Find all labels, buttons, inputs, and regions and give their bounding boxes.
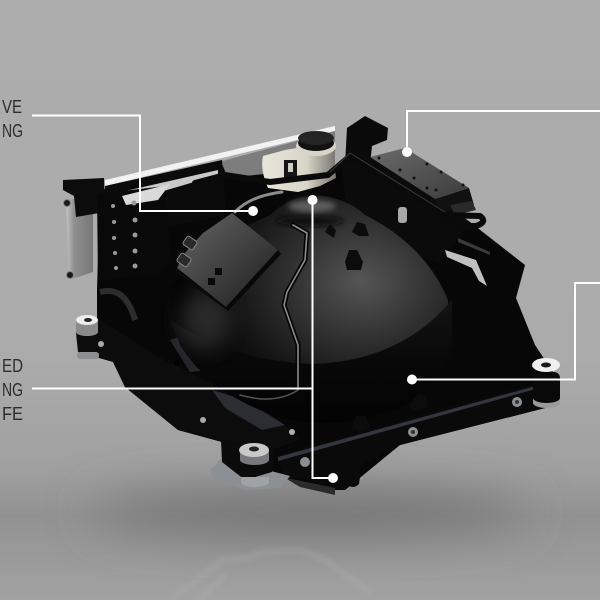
rear white edge strip [105, 126, 335, 186]
callout: label top left: VE [2, 97, 22, 117]
dome tank [170, 195, 452, 432]
left foot [76, 315, 99, 359]
right side machinery [398, 207, 490, 286]
callout: label bottom left: ED [2, 356, 23, 376]
solid machine silhouette [97, 164, 555, 490]
rear rail [105, 160, 226, 240]
front rail [275, 376, 558, 495]
silver tube [235, 192, 307, 399]
bottom nub [345, 470, 361, 487]
rear panel [222, 131, 335, 180]
electronics box [174, 213, 281, 311]
top tower [345, 116, 388, 165]
leader line: right [407, 283, 600, 384]
leader line: top left [32, 116, 258, 216]
floor shadow [90, 492, 530, 532]
radiator side plate [66, 197, 93, 280]
connector block [97, 184, 172, 280]
left rail [76, 318, 300, 462]
coolant reservoir [262, 131, 336, 192]
top left bracket [63, 178, 105, 217]
floor reflection [170, 550, 370, 600]
callout: label bottom left [2, 356, 23, 424]
left hose [100, 291, 135, 320]
rail highlights [112, 170, 218, 210]
coolant tube [195, 153, 483, 226]
callout: label top left [2, 97, 23, 141]
rear right housing [342, 155, 470, 262]
dome knobs [325, 222, 428, 432]
plate bolts [64, 200, 74, 278]
control box lid [370, 148, 476, 215]
front right foot [532, 358, 560, 408]
machine [63, 116, 560, 495]
leader line: bottom left [32, 195, 338, 483]
callout: label bottom left: FE [2, 404, 23, 424]
callout: label bottom left: NG [2, 380, 23, 400]
front left foot [210, 440, 290, 490]
callout: label top left: NG [2, 121, 23, 141]
leader line: top right [402, 111, 600, 157]
